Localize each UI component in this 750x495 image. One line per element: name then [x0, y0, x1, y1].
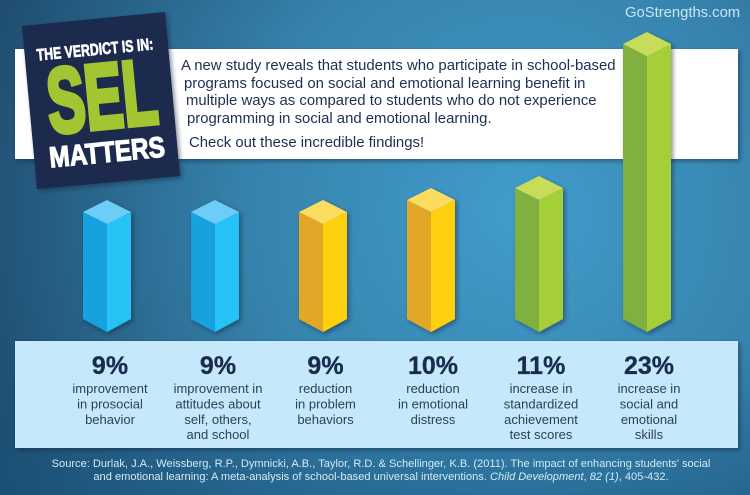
result: 9% attitudes: [174, 352, 262, 442]
result: 10% emotional distress: [398, 352, 468, 427]
source citation: Source: Durlak, J.A., Weissberg, R.P., Dymnicki, A.B., Taylor, R.D. & Schellinger, K.B. (2011). The impact of enhancing students' social: [52, 458, 710, 470]
result: 9% attitudes: self, others,: [184, 412, 252, 427]
result: 9% problem behaviors: in problem: [295, 396, 356, 412]
bar: test scores 11%: [515, 176, 563, 332]
result: 11% test scores: [504, 352, 578, 442]
bar: problem behaviors 9%: [299, 200, 347, 332]
result: 9% problem behaviors: 9%: [307, 352, 344, 380]
bar: prosocial behavior 9%: [83, 200, 131, 332]
result: 11% test scores: standardized: [504, 396, 578, 412]
bar: attitudes 9%: [191, 200, 239, 332]
title: the verdict is in: THE VERDICT IS IN:: [36, 35, 154, 65]
result: 23% social and emotional skills: [618, 352, 680, 442]
title: SEL: SEL: [42, 41, 162, 153]
result: 9% prosocial: [72, 352, 148, 427]
result: 11% test scores: increase in: [510, 381, 572, 396]
intro text: programs focused on social and emotional learning benefit in: [184, 76, 585, 92]
result: 23% social and emotional skills: increase in: [618, 381, 680, 396]
result: 9% prosocial: in prosocial: [77, 396, 143, 412]
result: 10% emotional distress: reduction: [406, 381, 460, 396]
intro text: A new study reveals that students who participate in school-based: [181, 58, 616, 74]
result: 9% attitudes: attitudes about: [175, 396, 261, 412]
intro text: Check out these incredible findings!: [189, 135, 424, 151]
result: 9% attitudes: 9%: [200, 352, 236, 380]
intro text: [181, 58, 616, 151]
result: 10% emotional distress: 10%: [408, 352, 458, 380]
source citation: and emotional learning: A meta-analysis of school-based universal interventions. Child Development, 82 (1), 405-432.: [93, 471, 669, 483]
result: 11% test scores: 11%: [517, 352, 565, 380]
bar: emotional distress 10%: [407, 188, 455, 332]
result: 9% attitudes: and school: [187, 427, 250, 442]
result: 23% social and emotional skills: emotional: [621, 412, 677, 427]
result: 10% emotional distress: in emotional: [398, 396, 468, 412]
intro text: programming in social and emotional learning.: [187, 111, 492, 127]
title: MATTERS: MATTERS: [48, 132, 166, 175]
result: 9% attitudes: improvement in: [174, 381, 262, 396]
result: 9% problem behaviors: [295, 352, 356, 427]
result: 23% social and emotional skills: 23%: [624, 352, 674, 380]
result: 23% social and emotional skills: skills: [635, 427, 664, 442]
result: 9% prosocial: 9%: [92, 352, 128, 380]
site credit: GoStrengths.com: [625, 5, 740, 21]
result: 11% test scores: achievement: [504, 412, 578, 427]
intro panel: [15, 49, 738, 159]
result: 9% prosocial: improvement: [72, 381, 148, 396]
result: 23% social and emotional skills: social and: [620, 396, 678, 412]
results panel: [15, 341, 738, 448]
bar: social emotional skills 23%: [623, 32, 671, 332]
result: 9% problem behaviors: behaviors: [297, 412, 354, 427]
result: 9% prosocial: behavior: [85, 412, 136, 427]
result: 9% problem behaviors: reduction: [299, 381, 352, 396]
intro text: multiple ways as compared to students who do not experience: [186, 93, 597, 109]
title badge: [22, 12, 180, 189]
result: 11% test scores: test scores: [510, 427, 573, 442]
result: 10% emotional distress: distress: [411, 412, 456, 427]
source citation: [52, 458, 710, 483]
